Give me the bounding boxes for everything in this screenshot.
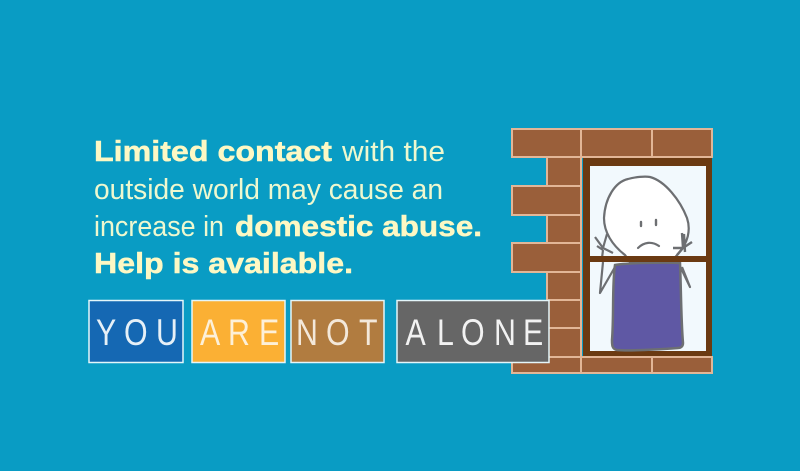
tile: YOU: YOU (96, 312, 178, 354)
line 2: outside world may cause an (94, 174, 443, 206)
mouth (638, 243, 659, 248)
line 3: domestic abuse. (235, 211, 482, 243)
window glass (590, 166, 706, 351)
right hand (673, 233, 692, 255)
tile: ARE (192, 300, 285, 362)
head (604, 177, 689, 262)
tile: ALONE (397, 300, 549, 362)
eyes (641, 220, 656, 226)
tile: NOT: NOT (296, 312, 378, 354)
tile: NOT (291, 300, 384, 362)
left hand (595, 234, 613, 258)
line 3 (94, 211, 482, 243)
illustration: brick wall and window (512, 129, 712, 373)
arms (600, 262, 690, 293)
tile: ALONE: ALONE (405, 312, 543, 354)
line 3: increase in (94, 211, 224, 243)
line 1: with the (341, 136, 445, 168)
body (612, 263, 683, 350)
figure: sad person (595, 177, 692, 350)
line 4: Help is available. (94, 248, 353, 280)
line 1 (94, 136, 445, 168)
headline text (94, 136, 482, 280)
window frame (583, 158, 712, 356)
tile: YOU (89, 300, 183, 362)
window middle bar (590, 256, 706, 262)
line 1: Limited contact (94, 136, 332, 168)
tile: ARE: ARE (200, 312, 279, 354)
brick wall (512, 129, 712, 373)
